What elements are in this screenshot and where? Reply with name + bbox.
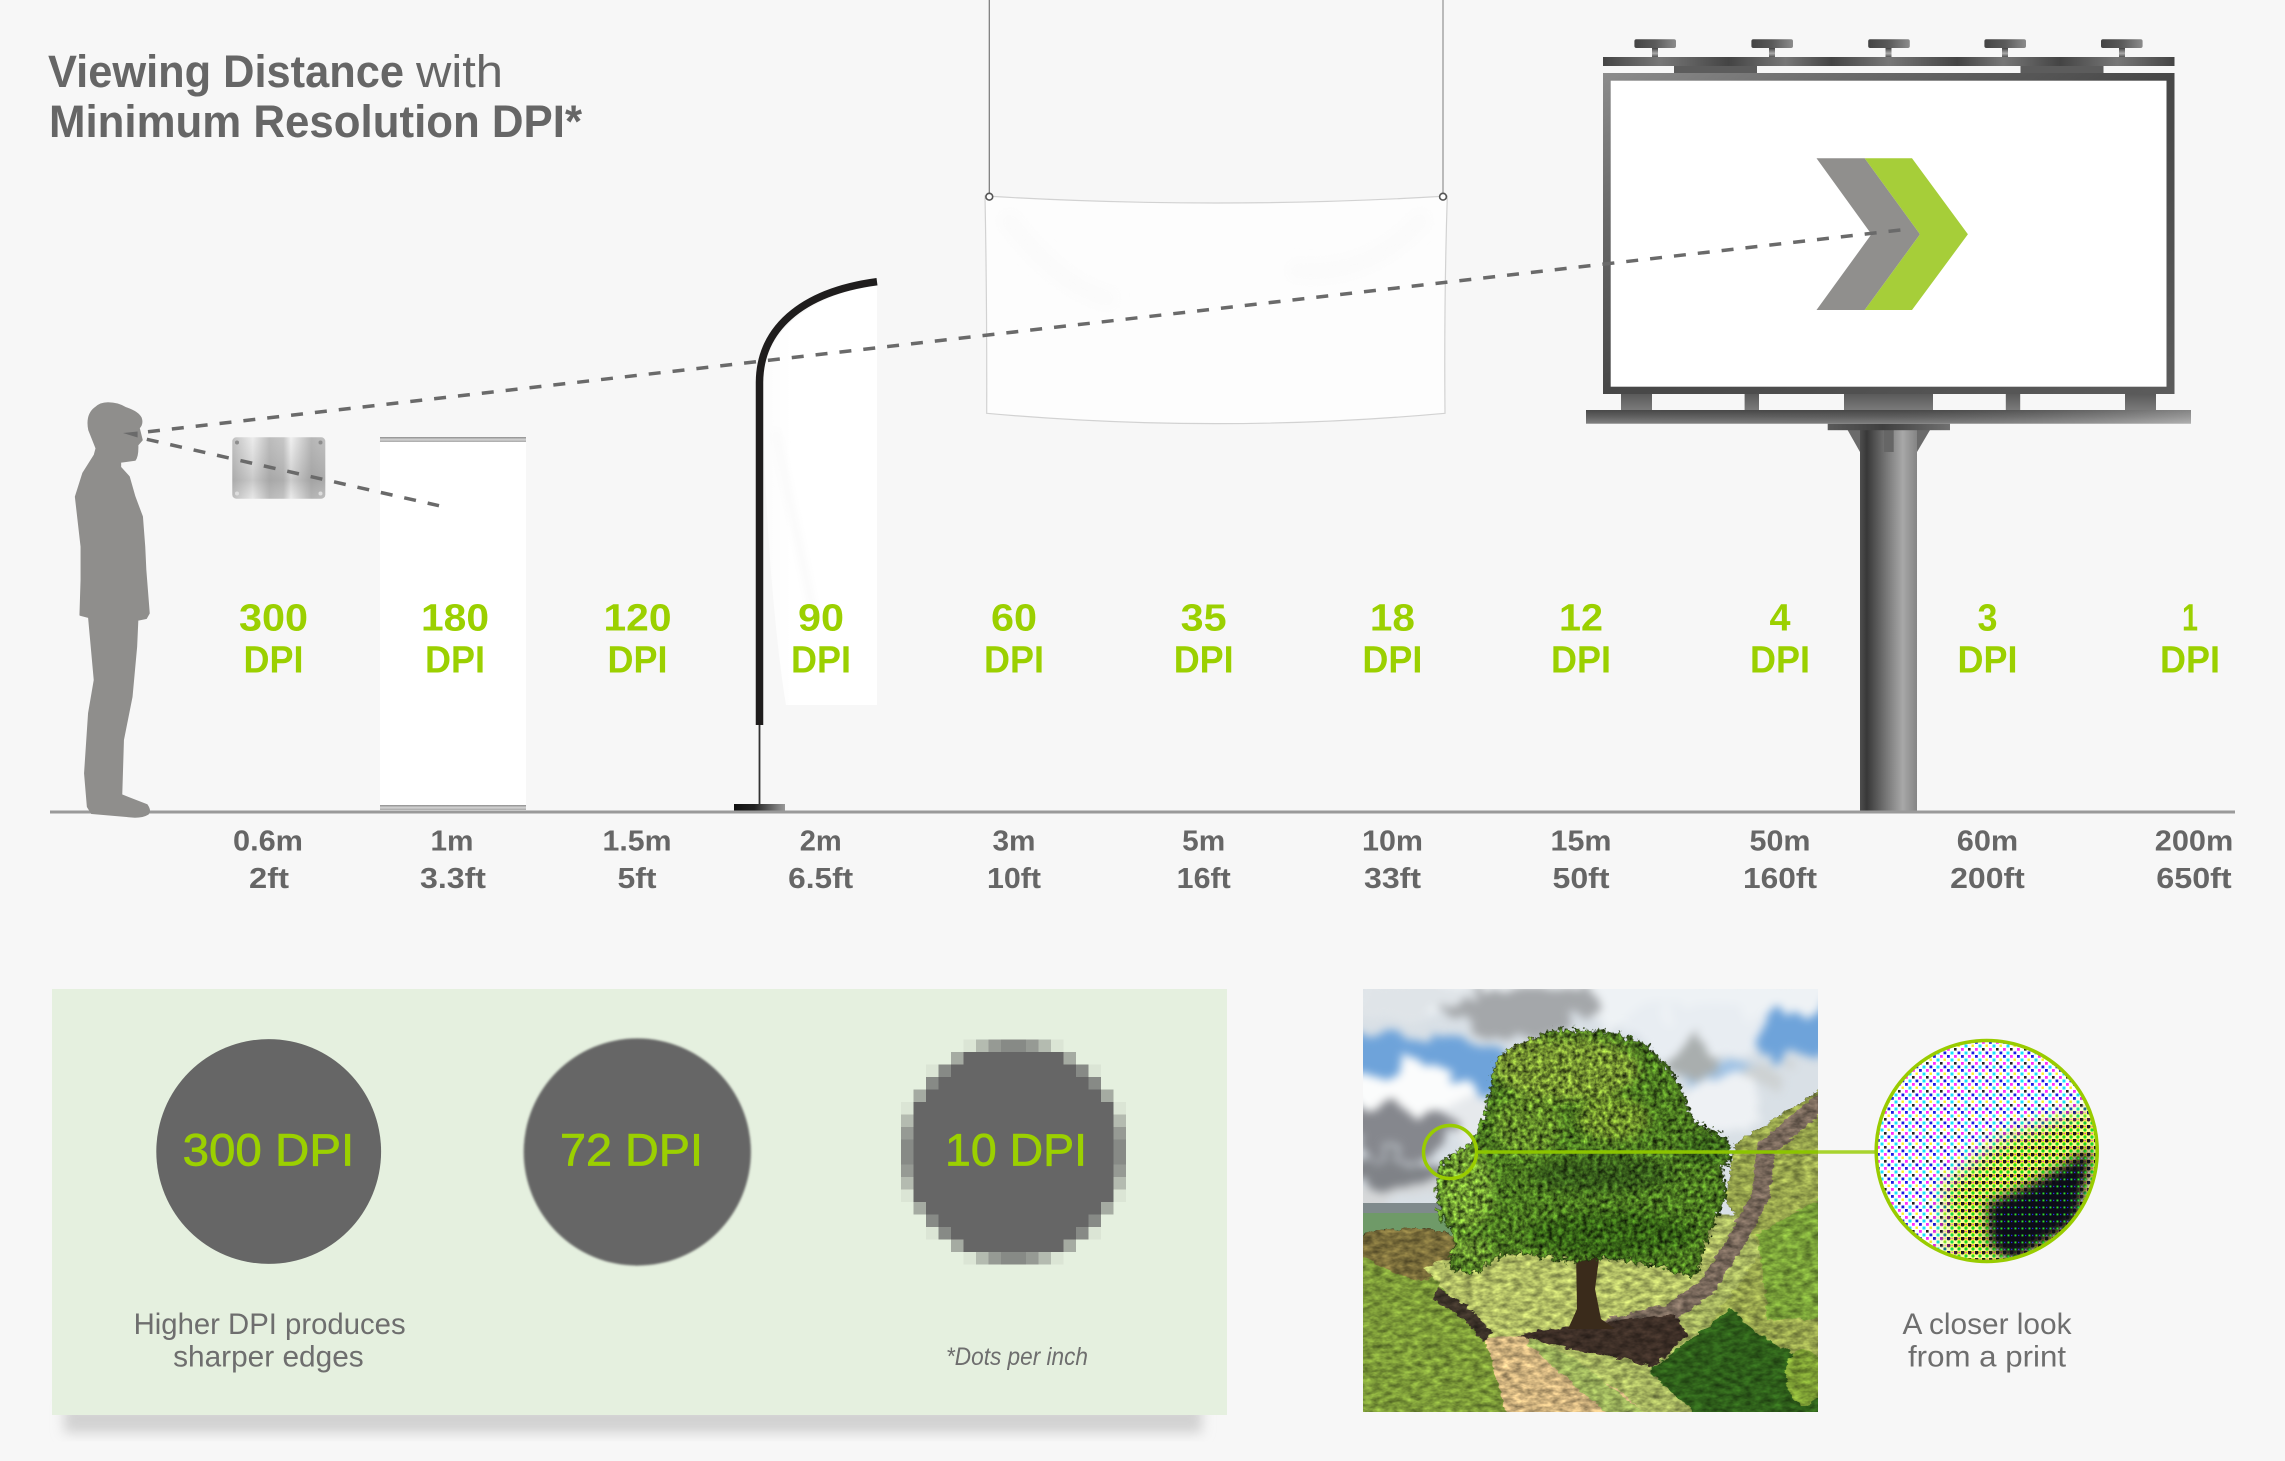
feather flag bbox=[734, 282, 877, 811]
12 DPI bbox=[1551, 598, 1611, 681]
4 DPI bbox=[1750, 598, 1810, 681]
distance 1m: 3.3ft bbox=[420, 863, 486, 895]
title: Minimum Resolution DPI* bbox=[49, 96, 582, 147]
10 DPI pixelated circle: 10 DPI bbox=[945, 1125, 1087, 1176]
12 DPI: 12 bbox=[1559, 598, 1603, 640]
tree canopy bbox=[1438, 1031, 1731, 1277]
distance 60m: 200ft bbox=[1950, 863, 2025, 895]
distance 15m bbox=[1550, 826, 1612, 895]
4 DPI: 4 bbox=[1770, 598, 1790, 640]
35 DPI: DPI bbox=[1174, 639, 1234, 681]
billboard lamps bbox=[1603, 39, 2174, 73]
300 DPI: 300 bbox=[239, 598, 308, 640]
title: Viewing Distance bbox=[48, 46, 404, 97]
1 DPI: 1 bbox=[2182, 598, 2198, 640]
title bbox=[48, 46, 582, 147]
sight line to billboard bbox=[148, 230, 1900, 432]
300 DPI circle bbox=[156, 1039, 381, 1264]
18 DPI bbox=[1362, 598, 1422, 681]
distance 1.5m bbox=[602, 826, 672, 895]
120 DPI bbox=[604, 598, 672, 681]
distance 3m: 3m bbox=[992, 826, 1036, 858]
1 DPI bbox=[2160, 598, 2220, 681]
distance labels bbox=[233, 826, 2233, 895]
distance 60m bbox=[1950, 826, 2025, 895]
distance 2m bbox=[788, 826, 854, 895]
billboard bbox=[1586, 39, 2191, 811]
300 DPI: DPI bbox=[244, 639, 304, 681]
caption: higher DPI bbox=[134, 1308, 406, 1374]
caption: higher DPI: Higher DPI produces bbox=[134, 1308, 406, 1341]
distance 3m: 10ft bbox=[987, 863, 1041, 895]
distance 60m: 60m bbox=[1957, 826, 2018, 858]
distance 15m: 15m bbox=[1550, 826, 1612, 858]
distance 50m: 160ft bbox=[1743, 863, 1817, 895]
clouds bbox=[1363, 989, 1818, 1203]
72 DPI circle bbox=[524, 1038, 751, 1266]
distance 50m bbox=[1743, 826, 1817, 895]
caption: closer look: from a print bbox=[1908, 1341, 2067, 1374]
distant hills bbox=[1363, 1203, 1442, 1213]
metal plaque bbox=[232, 437, 325, 499]
3 DPI: DPI bbox=[1958, 639, 2018, 681]
distance 200m: 200m bbox=[2155, 826, 2233, 858]
roller banner bbox=[380, 437, 526, 810]
billboard pole bbox=[1848, 430, 1930, 811]
90 DPI: DPI bbox=[791, 639, 851, 681]
distance 3m bbox=[987, 826, 1041, 895]
magnifier ring and connector bbox=[1424, 1126, 1876, 1178]
distance 5m bbox=[1177, 826, 1231, 895]
3 DPI bbox=[1958, 598, 2018, 681]
distance 5m: 5m bbox=[1182, 826, 1225, 858]
180 DPI bbox=[421, 598, 489, 681]
billboard frame bbox=[1603, 73, 2174, 394]
distance 2m: 6.5ft bbox=[788, 863, 854, 895]
distance 2m: 2m bbox=[800, 826, 842, 858]
90 DPI bbox=[791, 598, 851, 681]
300 DPI bbox=[239, 598, 308, 681]
distance 1.5m: 1.5m bbox=[602, 826, 672, 858]
hanging banner bbox=[985, 0, 1447, 424]
billboard platform bbox=[1586, 394, 2191, 430]
12 DPI: DPI bbox=[1551, 639, 1611, 681]
distance 0.6m bbox=[233, 826, 303, 895]
tree trunk bbox=[1568, 1251, 1615, 1329]
120 DPI: 120 bbox=[604, 598, 672, 640]
panel: DPI sharpness comparison bbox=[52, 989, 1227, 1433]
distance 10m: 10m bbox=[1362, 826, 1423, 858]
18 DPI: DPI bbox=[1362, 639, 1422, 681]
ground bbox=[1363, 1089, 1818, 1412]
title: with bbox=[415, 46, 503, 97]
distance 1m bbox=[420, 826, 486, 895]
footnote: dots per inch: *Dots per inch bbox=[946, 1343, 1088, 1371]
35 DPI: 35 bbox=[1181, 598, 1227, 640]
person silhouette bbox=[76, 403, 149, 817]
panel shadow bbox=[64, 1405, 1202, 1433]
35 DPI bbox=[1174, 598, 1234, 681]
distance 15m: 50ft bbox=[1552, 863, 1610, 895]
photo: tree in landscape bbox=[1363, 989, 1818, 1412]
60 DPI: 60 bbox=[991, 598, 1037, 640]
distance 5m: 16ft bbox=[1177, 863, 1231, 895]
1 DPI: DPI bbox=[2160, 639, 2220, 681]
sight line to plaque bbox=[147, 439, 439, 506]
ground line bbox=[50, 810, 2235, 814]
distance 200m: 650ft bbox=[2156, 863, 2232, 895]
4 DPI: DPI bbox=[1750, 639, 1810, 681]
distance 0.6m: 2ft bbox=[249, 863, 289, 895]
chevron logo bbox=[1816, 158, 1968, 310]
caption: closer look: A closer look bbox=[1902, 1308, 2072, 1341]
60 DPI: DPI bbox=[984, 639, 1044, 681]
distance 10m: 33ft bbox=[1364, 863, 1421, 895]
caption: closer look bbox=[1902, 1308, 2072, 1374]
180 DPI: 180 bbox=[421, 598, 489, 640]
10 DPI pixelated circle bbox=[901, 1039, 1126, 1264]
180 DPI: DPI bbox=[425, 639, 485, 681]
distance 1.5m: 5ft bbox=[618, 863, 657, 895]
300 DPI circle: 300 DPI bbox=[183, 1125, 354, 1176]
distance 1m: 1m bbox=[430, 826, 474, 858]
distance 10m bbox=[1362, 826, 1423, 895]
90 DPI: 90 bbox=[798, 598, 844, 640]
72 DPI circle: 72 DPI bbox=[560, 1125, 703, 1176]
18 DPI: 18 bbox=[1370, 598, 1415, 640]
caption: higher DPI: sharper edges bbox=[173, 1341, 364, 1374]
distance 200m bbox=[2155, 826, 2233, 895]
DPI labels bbox=[239, 598, 2220, 681]
120 DPI: DPI bbox=[608, 639, 668, 681]
panel background bbox=[52, 989, 1227, 1415]
distance 0.6m: 0.6m bbox=[233, 826, 303, 858]
60 DPI bbox=[984, 598, 1044, 681]
magnified halftone lens bbox=[1870, 1035, 2105, 1270]
distance 50m: 50m bbox=[1750, 826, 1810, 858]
3 DPI: 3 bbox=[1978, 598, 1998, 640]
